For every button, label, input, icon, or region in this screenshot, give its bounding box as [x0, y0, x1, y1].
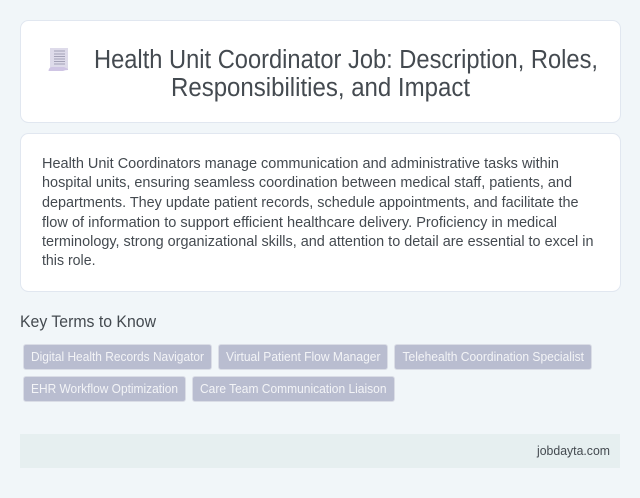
title: Health Unit Coordinator Job: Description, Roles, — [94, 46, 598, 74]
footer text: site name: jobdayta.com — [536, 444, 610, 458]
text block: description — [42, 156, 593, 269]
tag: Telehealth Coordination Specialist — [394, 344, 592, 370]
text block: description: terminology, strong organizational skills, and attention to detail are essential to excel in — [42, 234, 593, 250]
text block: description: Health Unit Coordinators manage communication and administrative tasks within — [42, 156, 559, 172]
tag: Care Team Communication Liaison — [192, 376, 394, 402]
text block: description: flow of information to support efficient healthcare delivery. Proficiency in medical — [42, 215, 557, 231]
tag: EHR Workflow Optimization — [24, 376, 186, 402]
title — [94, 46, 598, 102]
title: Responsibilities, and Impact — [171, 74, 470, 102]
text block: description: this role. — [42, 253, 96, 269]
tag: EHR Workflow Optimization: EHR Workflow Optimization — [31, 382, 178, 396]
tag: Virtual Patient Flow Manager — [218, 344, 388, 370]
tag: Telehealth Coordination Specialist: Telehealth Coordination Specialist — [402, 350, 585, 364]
text block: description: departments. They update patient records, schedule appointments, and facilitate the — [42, 195, 578, 211]
icon: document scroll — [48, 48, 68, 71]
tag: Digital Health Records Navigator — [24, 344, 212, 370]
text block: description: hospital units, ensuring seamless coordination between medical staff, patients, and — [42, 175, 572, 191]
tag: Virtual Patient Flow Manager: Virtual Patient Flow Manager — [226, 350, 380, 364]
tag: Digital Health Records Navigator: Digital Health Records Navigator — [31, 350, 204, 364]
panel: description card — [20, 134, 620, 292]
tag: Care Team Communication Liaison: Care Team Communication Liaison — [200, 382, 387, 396]
heading: key terms: Key Terms to Know — [20, 313, 156, 331]
panel: title card — [20, 20, 620, 122]
footer bar — [20, 434, 620, 468]
